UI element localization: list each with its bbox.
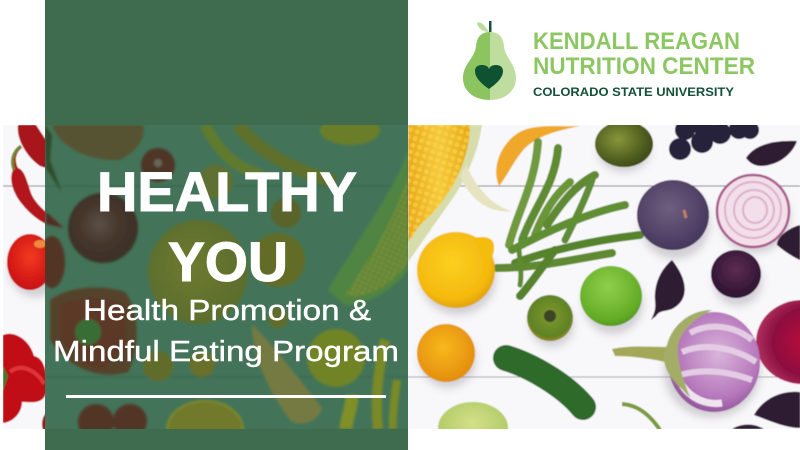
corn cob xyxy=(408,125,512,262)
sliced red onion xyxy=(717,175,789,247)
left bottom tomato xyxy=(41,413,45,429)
stem bottom xyxy=(622,404,660,430)
panel: translucent tint over photo with tinted produce xyxy=(45,125,408,429)
yellow pepper xyxy=(496,126,580,186)
photo: fresh vegetables and fruit xyxy=(3,117,800,450)
lemon xyxy=(417,232,495,308)
fig xyxy=(637,180,709,250)
green beans xyxy=(497,142,640,296)
white rule under subtitle xyxy=(66,395,386,398)
logo text: Nutrition Center: NUTRITION CENTER xyxy=(533,53,755,80)
dark green tomato xyxy=(595,121,653,167)
heading: YOU: YOU xyxy=(168,230,288,293)
logo text: Kendall Reagan: KENDALL REAGAN xyxy=(533,28,740,55)
icon: pear with heart xyxy=(463,21,516,100)
logo: Kendall Reagan Nutrition Center xyxy=(463,21,755,100)
subtitle line 2: Mindful Eating Program xyxy=(53,336,399,368)
eggplant xyxy=(612,310,760,412)
left red tomato xyxy=(6,233,45,290)
pear bottom xyxy=(438,402,508,429)
lime xyxy=(580,266,642,326)
shadows xyxy=(9,132,790,418)
panel: green title panel xyxy=(39,0,408,450)
cucumber xyxy=(506,358,583,407)
subtitle line 1: Health Promotion & xyxy=(83,295,371,327)
red cabbage xyxy=(756,300,800,384)
logo text: Colorado State University: COLORADO STATE UNIVERSITY xyxy=(533,87,734,99)
left red chilies xyxy=(11,125,46,224)
orange tomato xyxy=(417,324,475,382)
dark basil leaves xyxy=(651,141,800,429)
grapes xyxy=(668,125,760,161)
plum xyxy=(711,250,761,298)
left red bell pepper xyxy=(3,334,46,423)
green tomato xyxy=(527,295,573,341)
heading: HEALTHY: HEALTHY xyxy=(97,160,357,223)
